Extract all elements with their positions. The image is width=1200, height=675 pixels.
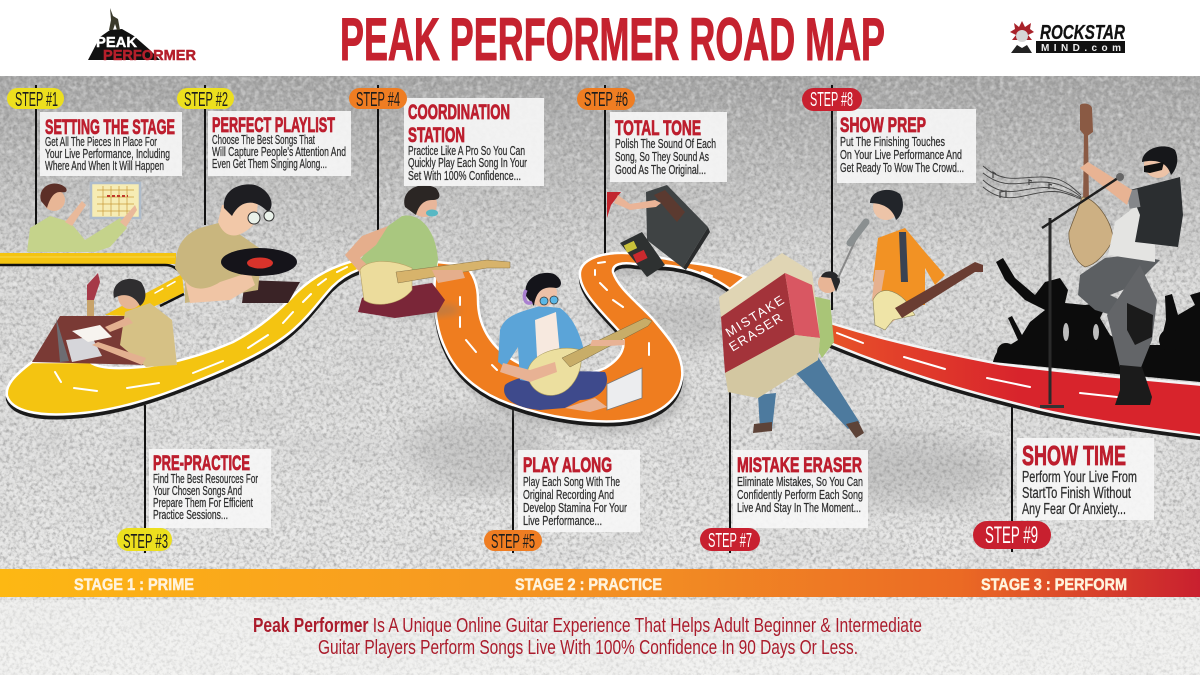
figure: man writing at desk: [32, 273, 177, 367]
road: red stage 3: [790, 310, 1200, 442]
step 4 body: [408, 143, 527, 183]
step 3 badge: STEP #3: [123, 531, 168, 553]
step 2 badge: [177, 88, 234, 111]
step 3 panel: [149, 449, 271, 528]
step 9 body: StartTo Finish Without: [1022, 485, 1131, 502]
road: yellow stage 1: [0, 253, 358, 418]
step 6 body: [615, 136, 716, 177]
stage bar: [0, 569, 1200, 597]
step 8 body: Put The Finishing Touches: [840, 134, 945, 149]
step 2 badge: STEP #2: [184, 89, 228, 111]
step 5 body: [523, 474, 628, 528]
step 5 heading: PLAY ALONG: [523, 454, 612, 477]
step 2 body: Will Capture People's Attention And: [212, 144, 346, 159]
step 4 panel: [404, 98, 544, 186]
figure: man carrying eraser box: [719, 253, 864, 438]
logo: Peak Performer: PERFORMER: [103, 47, 196, 64]
logo: Rockstar Mind: MIND.com: [1041, 43, 1121, 54]
logo: Peak Performer: [88, 8, 196, 64]
step 1 body: [45, 134, 170, 173]
step 5 panel: [518, 450, 640, 532]
step 7 panel: [733, 450, 868, 528]
step 2 body: Even Get Them Singing Along...: [212, 156, 327, 171]
figure: man at calendar board: [27, 183, 140, 252]
road: orange stage 2: [434, 253, 749, 433]
crowd silhouette: [993, 258, 1200, 382]
figure: man carrying eraser box: MISTAKE: [723, 292, 787, 340]
step 6 body: Good As The Original...: [615, 162, 706, 177]
white header band: [0, 0, 1200, 76]
step 8 badge: STEP #8: [810, 89, 853, 111]
step 3 body: Practice Sessions...: [153, 507, 228, 522]
step 1 body: Get All The Pieces In Place For: [45, 134, 157, 149]
logo: Peak Performer: PEAK: [96, 34, 137, 51]
step 1 body: Your Live Performance, Including: [45, 146, 170, 161]
step 5 badge: STEP #5: [491, 531, 535, 553]
step 4 body: Quickly Play Each Song In Your: [408, 155, 527, 170]
step 8 panel: [837, 109, 976, 183]
stage 3 label: STAGE 3 : PERFORM: [981, 575, 1127, 594]
step 4 body: Practice Like A Pro So You Can: [408, 143, 525, 158]
step 4 badge: [349, 88, 407, 111]
step 6 heading: TOTAL TONE: [615, 117, 701, 140]
logo: Rockstar Mind: [1010, 21, 1125, 54]
stage 2 label: STAGE 2 : PRACTICE: [515, 575, 662, 594]
step 1 body: Where And When It Will Happen: [45, 158, 164, 173]
step 5 body: Live Performance...: [523, 513, 602, 528]
step 2 body: Choose The Best Songs That: [212, 132, 315, 147]
figure: amp and pedal: [607, 185, 710, 277]
step 3 body: [153, 471, 258, 522]
step 6 badge: [577, 88, 635, 111]
step 9 body: Any Fear Or Anxiety...: [1022, 501, 1126, 518]
music staff with notes: [983, 166, 1081, 199]
figure: man carrying eraser box: ERASER: [726, 310, 785, 354]
step 4 heading: STATION: [408, 124, 465, 147]
step 4 body: Set With 100% Confidence...: [408, 168, 521, 183]
step 1 panel: [40, 112, 182, 176]
step 2 panel: [208, 111, 351, 176]
step 8 body: Get Ready To Wow The Crowd...: [840, 160, 964, 175]
step 3 heading: PRE-PRACTICE: [153, 452, 250, 475]
step connector lines: [36, 85, 1012, 553]
footer description: Guitar Players Perform Songs Live With 100% Confidence In 90 Days Or Less.: [318, 636, 858, 659]
step 8 badge: [802, 88, 862, 111]
footer description: Peak Performer Is A Unique Online Guitar Experience That Helps Adult Beginner & Intermediate: [253, 614, 922, 637]
step 9 body: Perform Your Live From: [1022, 469, 1137, 486]
stage 1 label: STAGE 1 : PRIME: [74, 575, 194, 594]
step 7 body: Live And Stay In The Moment...: [737, 500, 861, 515]
step 7 badge: [700, 528, 760, 552]
step 4 heading: COORDINATION: [408, 101, 510, 124]
step 1 badge: [7, 88, 64, 111]
figure: guitarist in green shirt: [345, 185, 510, 318]
step 3 body: Find The Best Resources For: [153, 471, 258, 486]
step 6 body: Song, So They Sound As: [615, 149, 709, 164]
step 9 badge: STEP #9: [985, 522, 1038, 549]
step 8 body: On Your Live Performance And: [840, 147, 962, 162]
step 2 body: [212, 132, 346, 171]
step 1 heading: SETTING THE STAGE: [45, 116, 175, 139]
figure: bass player at microphone: [838, 190, 983, 330]
step 4 badge: STEP #4: [356, 89, 400, 111]
step 3 body: Prepare Them For Efficient: [153, 495, 253, 510]
figure: guitarist in blue shirt: [498, 273, 652, 412]
step 9 body: [1022, 469, 1137, 518]
step 6 badge: STEP #6: [584, 89, 628, 111]
step 7 body: Confidently Perform Each Song: [737, 487, 863, 502]
figure: man with vinyl record: [175, 184, 300, 303]
logo: Rockstar Mind: ROCKSTAR: [1040, 22, 1125, 44]
step 7 heading: MISTAKE ERASER: [737, 454, 862, 477]
step 3 body: Your Chosen Songs And: [153, 483, 242, 498]
figure: rock star with guitar: [1040, 104, 1183, 408]
step 7 body: Eliminate Mistakes, So You Can: [737, 474, 863, 489]
step 8 heading: SHOW PREP: [840, 114, 926, 137]
step 7 badge: STEP #7: [708, 530, 752, 552]
step 6 panel: [610, 112, 727, 182]
step 2 heading: PERFECT PLAYLIST: [212, 114, 335, 137]
step 9 panel: [1017, 438, 1154, 520]
step 9 badge: [973, 521, 1051, 549]
step 9 heading: SHOW TIME: [1022, 440, 1126, 471]
step 1 badge: STEP #1: [15, 89, 58, 111]
step 4 heading: [408, 101, 510, 147]
footer description: [253, 614, 922, 659]
step 3 badge: [117, 528, 172, 553]
step 7 body: [737, 474, 863, 515]
step 8 body: [840, 134, 964, 175]
step 5 body: Develop Stamina For Your: [523, 500, 628, 515]
step 5 body: Original Recording And: [523, 487, 614, 502]
step 5 badge: [484, 530, 542, 553]
step 6 body: Polish The Sound Of Each: [615, 136, 716, 151]
step 5 body: Play Each Song With The: [523, 474, 620, 489]
